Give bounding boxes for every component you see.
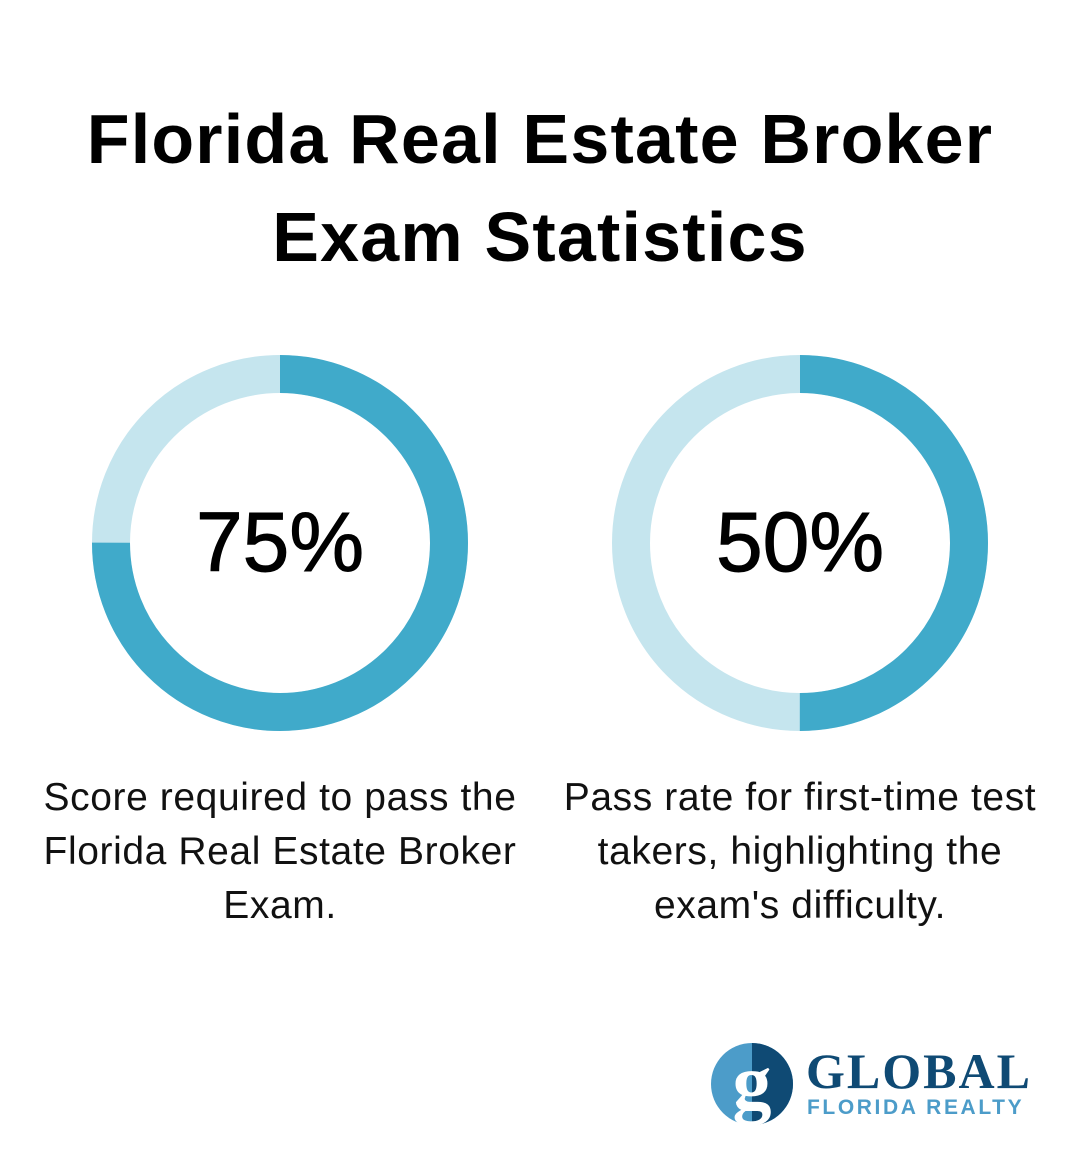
description: 50%: takers, highlighting the (598, 830, 1002, 873)
title: Florida Real Estate Broker (87, 100, 993, 178)
description: 50%: Pass rate for first-time test (564, 776, 1036, 819)
description: 75%: Score required to pass the (43, 776, 517, 819)
description: 50% (564, 776, 1036, 927)
donut chart: 75%: 75% (196, 495, 364, 589)
description: 50%: exam's difficulty. (654, 884, 946, 927)
donut chart: 50%: 50% (716, 495, 884, 589)
title (87, 100, 993, 276)
description: 75% (43, 776, 517, 927)
donut chart: 75% (92, 355, 468, 731)
logo: FLORIDA REALTY (807, 1096, 1024, 1119)
icon: g globe (711, 1042, 793, 1125)
logo (711, 1042, 1032, 1125)
donut chart: 50% (612, 355, 988, 731)
description: 75%: Florida Real Estate Broker (44, 830, 516, 873)
logo text: GLOBAL (806, 1043, 1032, 1099)
description: 75%: Exam. (223, 884, 337, 927)
title: Exam Statistics (272, 198, 808, 276)
